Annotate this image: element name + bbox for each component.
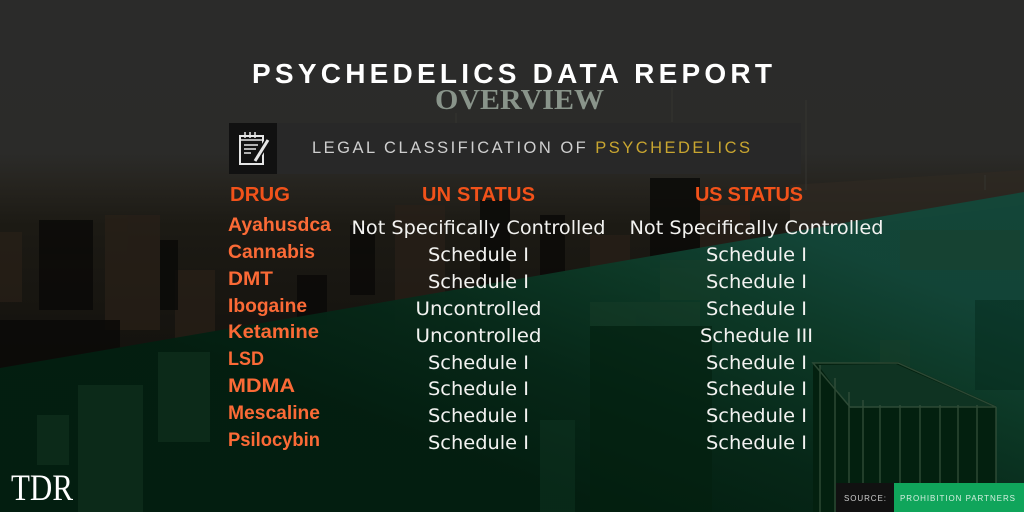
table header: US status: US STATUS (695, 184, 803, 206)
logo: TDR: TDR (11, 468, 73, 509)
drug names column: LSD (228, 348, 264, 370)
drug names column (228, 214, 331, 451)
drug names column: Ayahusdca (228, 214, 331, 236)
US status column: Not Specifically Controlled (630, 217, 884, 239)
US status column: Schedule I (706, 378, 807, 400)
drug names column: MDMA (228, 375, 295, 397)
drug names column: DMT (228, 268, 273, 290)
table header: drug: DRUG (230, 184, 290, 206)
drug names column: Ibogaine (228, 295, 307, 317)
icon: notepad and pencil (229, 123, 277, 174)
drug names column: Psilocybin (228, 429, 320, 451)
UN status column: Uncontrolled (416, 298, 542, 320)
UN status column: Schedule I (428, 405, 529, 427)
US status column: Schedule I (706, 298, 807, 320)
US status column: Schedule I (706, 405, 807, 427)
subtitle: OVERVIEW (435, 85, 604, 116)
US status column: Schedule I (706, 352, 807, 374)
US status column: Schedule III (700, 325, 813, 347)
UN status column (352, 217, 606, 454)
title: PSYCHEDELICS DATA REPORT (252, 58, 772, 89)
table header: UN status: UN STATUS (422, 184, 535, 206)
background: buildings seen through the green overlay (37, 230, 1024, 512)
US status column: Schedule I (706, 432, 807, 454)
drug names column: Mescaline (228, 402, 320, 424)
US status column (630, 217, 884, 454)
banner heading: LEGAL CLASSIFICATION OF PSYCHEDELICS (312, 139, 750, 157)
US status column: Schedule I (706, 271, 807, 293)
UN status column: Schedule I (428, 244, 529, 266)
section banner (229, 123, 801, 174)
background: green diagonal overlay (0, 192, 1024, 512)
UN status column: Uncontrolled (416, 325, 542, 347)
source badge: SOURCE: (844, 494, 886, 503)
source badge: PROHIBITION PARTNERS (900, 494, 1015, 503)
US status column: Schedule I (706, 244, 807, 266)
drug names column: Ketamine (228, 321, 319, 343)
right building with ribbed facade (813, 362, 996, 512)
UN status column: Schedule I (428, 378, 529, 400)
UN status column: Not Specifically Controlled (352, 217, 606, 239)
UN status column: Schedule I (428, 432, 529, 454)
drug names column: Cannabis (228, 241, 315, 263)
source badge (836, 483, 1024, 512)
UN status column: Schedule I (428, 271, 529, 293)
UN status column: Schedule I (428, 352, 529, 374)
